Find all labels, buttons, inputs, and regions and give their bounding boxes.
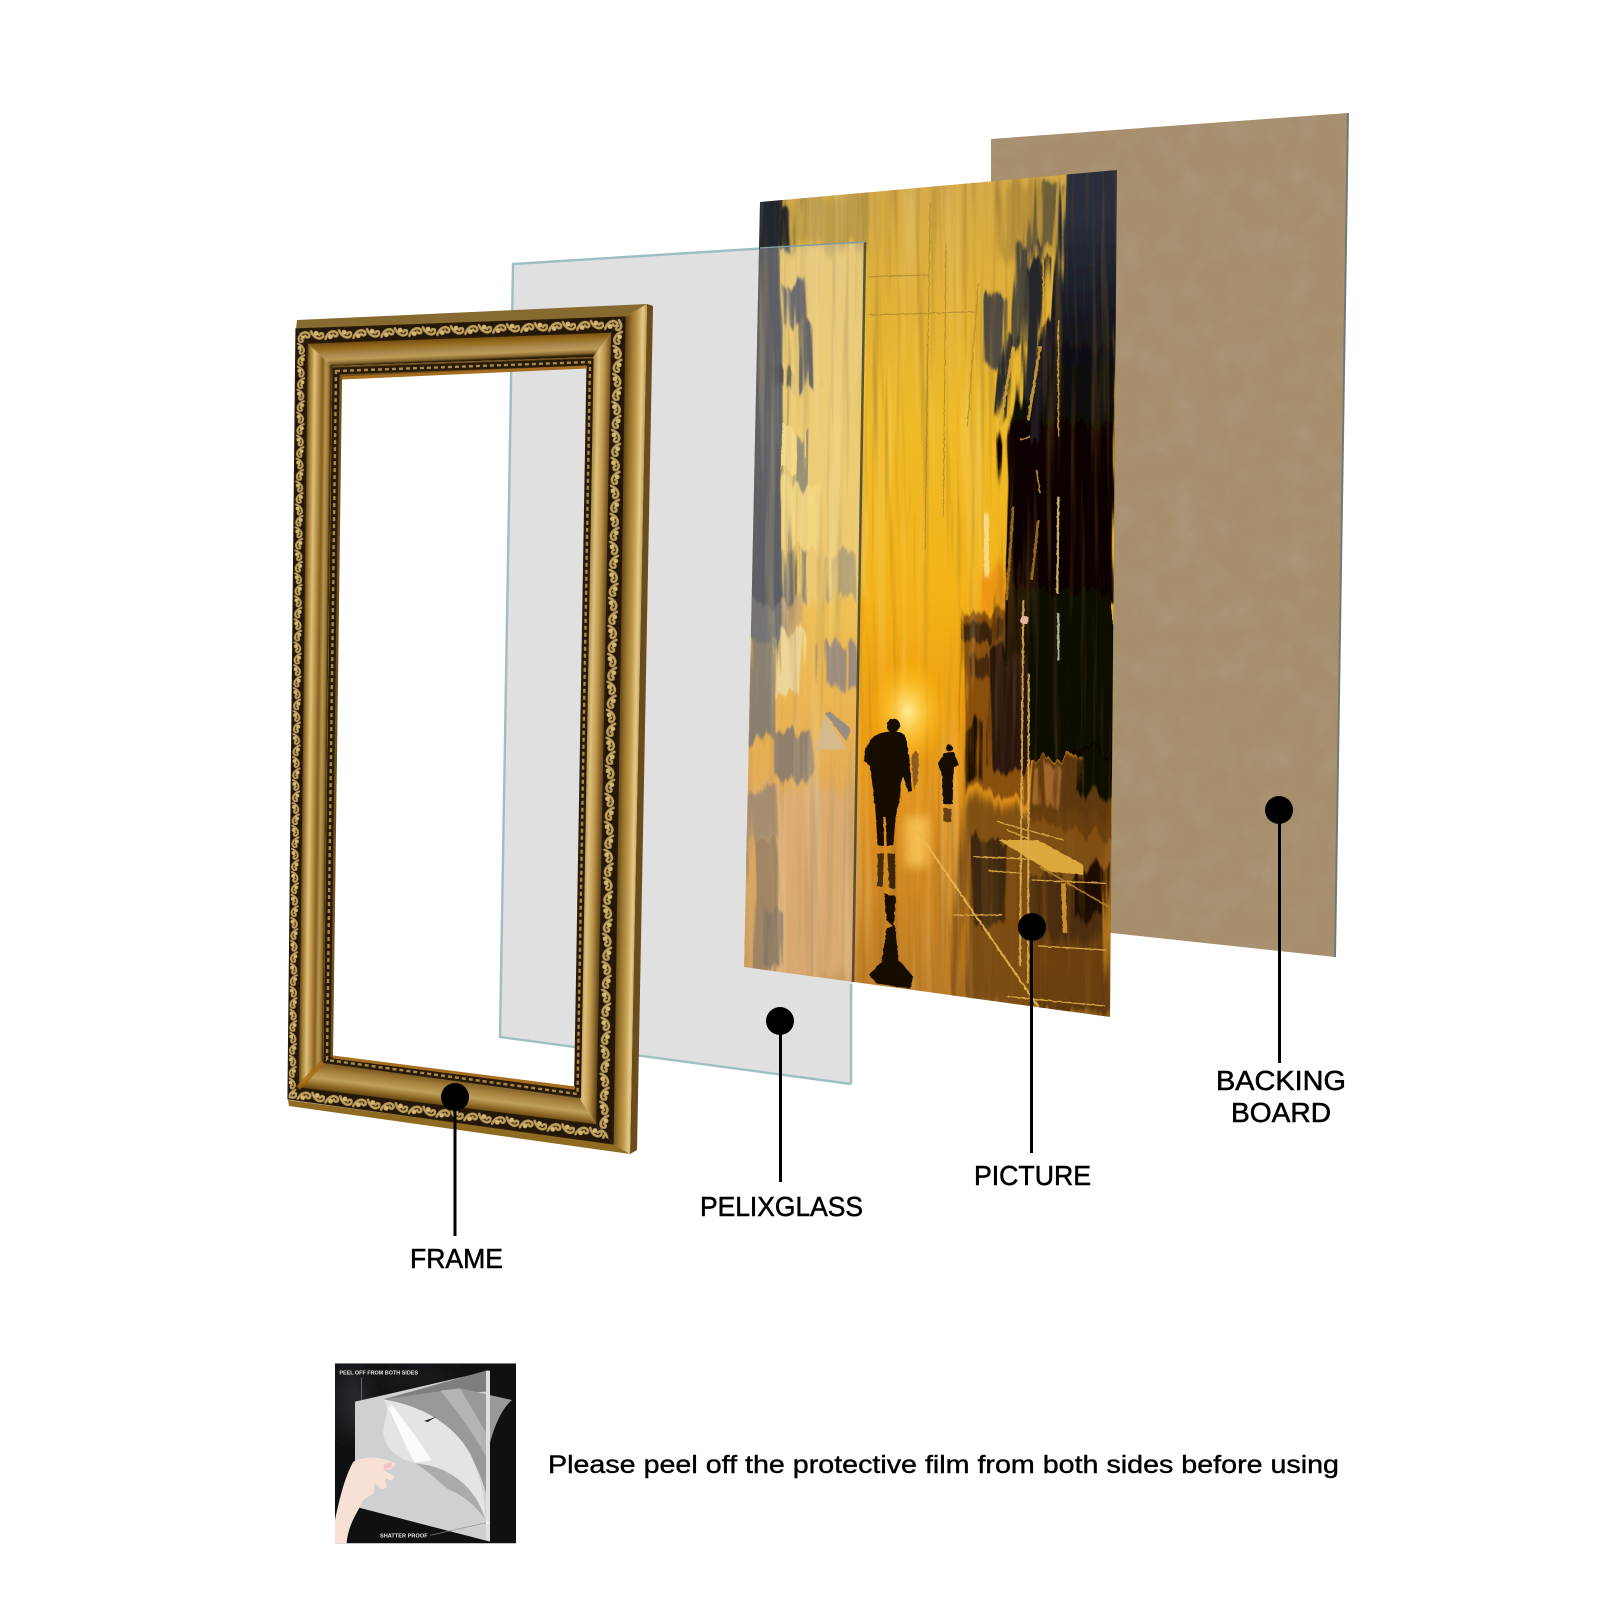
walking figure far bbox=[938, 745, 959, 804]
icon: protective film thumbnail: PEEL OFF FROM BOTH SIDES bbox=[339, 1370, 418, 1376]
text: peel off instruction: Please peel off the protective film from both sides before using bbox=[548, 1451, 1339, 1479]
infographic: exploded frame diagram bbox=[287, 113, 1349, 1544]
reflection bbox=[869, 853, 913, 989]
painted background strokes bbox=[743, 163, 1123, 1020]
panel: backing board bbox=[985, 105, 1355, 965]
walking figure near bbox=[864, 719, 912, 846]
fine painted lines and figures bbox=[816, 203, 1108, 1007]
callout: backing board: BACKING bbox=[1216, 1065, 1346, 1096]
callout: picture: PICTURE bbox=[974, 1160, 1091, 1191]
callout: backing board: BOARD bbox=[1231, 1097, 1331, 1128]
callout: frame bbox=[410, 1083, 503, 1274]
icon: protective film thumbnail: SHATTER PROOF bbox=[380, 1534, 428, 1540]
callout: backing board bbox=[1216, 796, 1346, 1128]
callout: pelixglass: PELIXGLASS bbox=[700, 1191, 863, 1222]
vertical brush streak texture bbox=[740, 165, 1120, 1020]
panel: ornate gold frame bbox=[288, 304, 653, 1154]
callout: frame: FRAME bbox=[410, 1243, 503, 1274]
small distant figure bbox=[911, 751, 919, 790]
glass overlay over picture bbox=[744, 242, 865, 982]
callout: pelixglass bbox=[700, 1007, 863, 1222]
callout: picture bbox=[974, 913, 1091, 1191]
panel: picture painting bbox=[740, 163, 1123, 1020]
icon: protective film thumbnail bbox=[335, 1363, 516, 1543]
panel: glass sheet bbox=[500, 242, 865, 1084]
